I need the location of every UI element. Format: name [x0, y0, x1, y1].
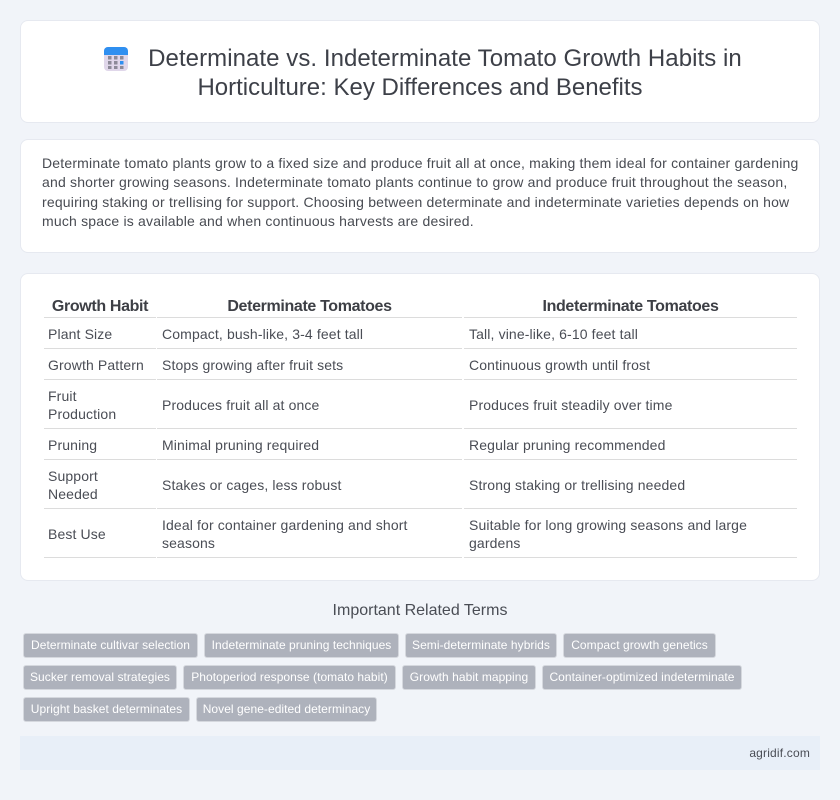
table header	[52, 298, 719, 315]
row: growth pattern: Continuous growth until frost	[469, 357, 650, 373]
intro text panel	[20, 139, 820, 253]
row: support needed: Support	[48, 468, 98, 484]
intro paragraph	[42, 155, 798, 229]
related term tags: Upright basket determinates	[31, 702, 182, 716]
row: growth pattern	[48, 357, 650, 373]
related term tags: Photoperiod response (tomato habit)	[191, 670, 388, 684]
row: growth pattern: Growth Pattern	[48, 357, 144, 373]
intro paragraph: Determinate tomato plants grow to a fixed size and produce fruit all at once, making them ideal for container gardening	[42, 155, 798, 171]
row: support needed	[48, 468, 685, 502]
related term tags: Container-optimized indeterminate	[549, 670, 735, 684]
related term tags: Semi-determinate hybrids	[412, 638, 550, 652]
row: support needed: Stakes or cages, less robust	[162, 477, 342, 493]
row: fruit production	[48, 388, 672, 422]
row: pruning	[48, 437, 666, 453]
row: best use: Best Use	[48, 526, 106, 542]
intro paragraph: and shorter growing seasons. Indeterminate tomato plants continue to grow and produce fruit throughout the season,	[42, 174, 787, 190]
related term tags: Compact growth genetics	[571, 638, 708, 652]
intro paragraph: much space is available and when continuous harvests are desired.	[42, 213, 474, 229]
intro paragraph: requiring staking or trellising for support. Choosing between determinate and indeterminate varieties depends on how	[42, 194, 789, 210]
table header: Indeterminate Tomatoes	[542, 298, 719, 315]
row: plant size: Plant Size	[48, 326, 112, 342]
related term tags	[23, 633, 742, 722]
row: fruit production: Produces fruit steadily over time	[469, 397, 672, 413]
related term tags: Indeterminate pruning techniques	[212, 638, 391, 652]
row: fruit production: Fruit	[48, 388, 77, 404]
row: pruning: Pruning	[48, 437, 97, 453]
row: pruning: Regular pruning recommended	[469, 437, 666, 453]
related term tags: Novel gene-edited determinacy	[203, 702, 370, 716]
row: growth pattern: Stops growing after fruit sets	[162, 357, 343, 373]
title: Horticulture: Key Differences and Benefits	[197, 74, 643, 101]
footer bar	[20, 736, 820, 770]
row: support needed: Needed	[48, 486, 98, 502]
row: best use: seasons	[162, 535, 215, 551]
row: pruning: Minimal pruning required	[162, 437, 319, 453]
footer source: agridif.com	[749, 746, 810, 760]
table header: Determinate Tomatoes	[227, 298, 392, 315]
row: plant size: Tall, vine-like, 6-10 feet tall	[469, 326, 638, 342]
header card	[20, 20, 820, 123]
title: Determinate vs. Indeterminate Tomato Growth Habits in	[148, 45, 742, 72]
row: best use: Suitable for long growing seasons and large	[469, 517, 747, 533]
row: fruit production: Production	[48, 406, 116, 422]
row: plant size: Compact, bush-like, 3-4 feet tall	[162, 326, 363, 342]
row: best use	[48, 517, 747, 551]
row: best use: gardens	[469, 535, 521, 551]
row: best use: Ideal for container gardening and short	[162, 517, 408, 533]
title	[148, 45, 742, 101]
related term tags: Growth habit mapping	[410, 670, 528, 684]
related term tags: Determinate cultivar selection	[31, 638, 190, 652]
row: support needed: Strong staking or trellising needed	[469, 477, 685, 493]
row: fruit production: Produces fruit all at once	[162, 397, 319, 413]
row: plant size	[48, 326, 638, 342]
icon: calendar	[104, 47, 128, 71]
comparison table panel	[20, 273, 820, 581]
table header: Growth Habit	[52, 298, 148, 315]
related term tags: Sucker removal strategies	[30, 670, 170, 684]
related terms heading: Important Related Terms	[333, 602, 507, 619]
